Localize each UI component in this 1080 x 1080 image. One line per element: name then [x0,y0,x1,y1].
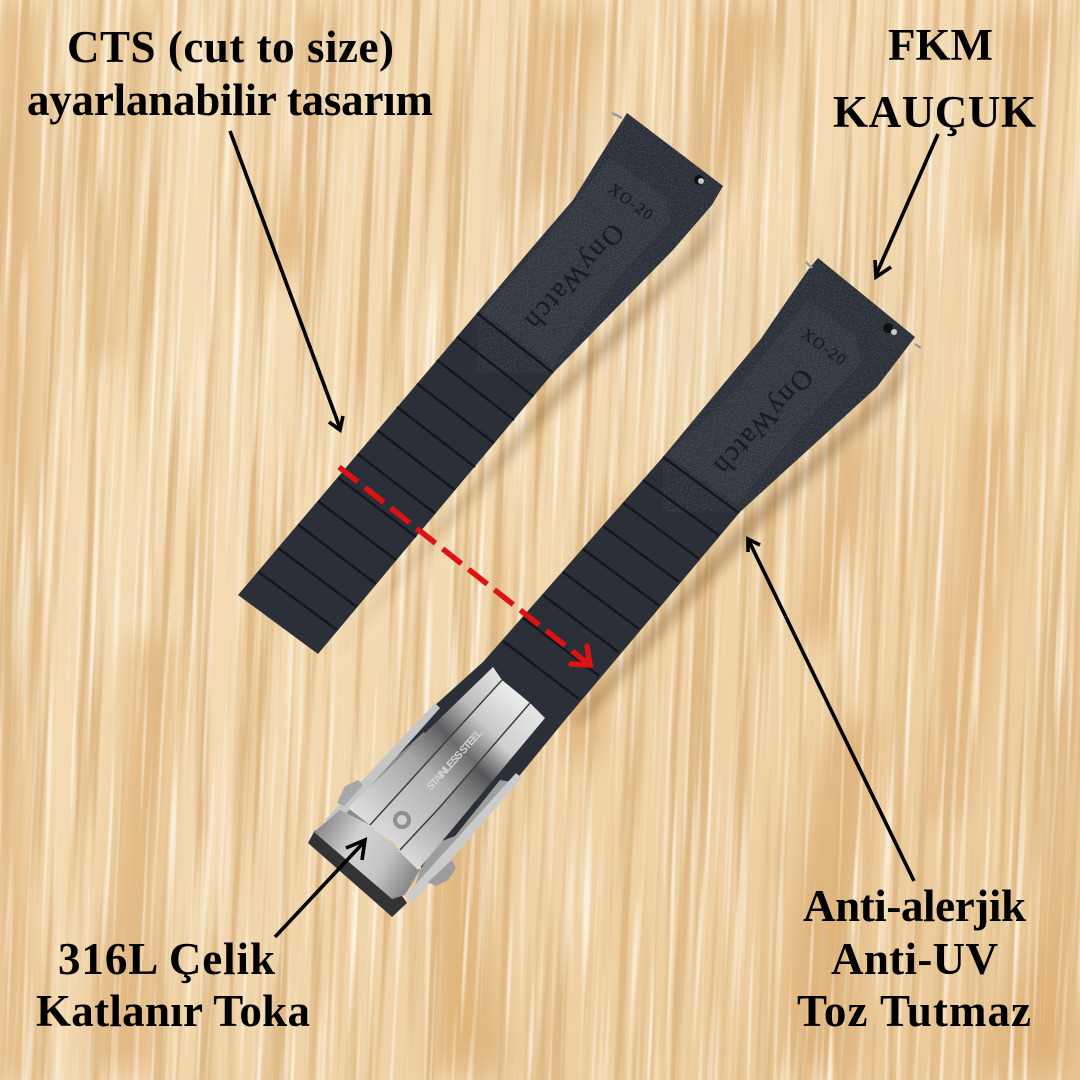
label: FKM rubber [833,20,1036,137]
label: clasp: 316L Çelik [58,934,275,984]
arrow: cut to size [230,131,343,430]
brand text: OnyWatch [519,217,630,336]
size text: XO-20 [798,326,849,369]
spring bar [612,113,704,185]
label: clasp: Katlanır Toka [36,986,310,1036]
strap: right piece [377,258,921,875]
label: CTS design [27,22,433,125]
clasp left wing [348,667,502,825]
strap: left piece [238,113,723,654]
clasp base plate [314,810,420,899]
label: features [797,881,1031,1036]
clasp right rail [405,773,522,903]
blade grooves [370,680,530,850]
red dashed arrow [339,467,590,665]
stainless steel engraving: STAINLESS STEEL [424,726,486,793]
strap body [238,113,723,654]
label: CTS design: CTS (cut to size) [67,22,394,72]
size text: XO-20 [605,181,656,224]
clasp dark front face [308,830,407,917]
label: clasp [36,934,310,1036]
label: features: Anti-alerjik [803,881,1026,931]
clasp right wing [398,703,545,870]
arrow: anti-allergic features [748,539,914,881]
arrow: FKM rubber [875,134,938,277]
label: CTS design: ayarlanabilir tasarım [27,75,433,125]
strap body [377,258,915,875]
recessed head panel [482,158,671,366]
strap rib lines [258,313,553,630]
label: FKM rubber: KAUÇUK [833,87,1036,137]
cast shadow under straps [325,195,915,725]
clasp left rail [325,703,440,826]
arrow: clasp [275,840,365,937]
recessed head panel [668,300,862,505]
brand text: OnyWatch [708,362,819,481]
label: FKM rubber: FKM [888,20,993,70]
strap rib lines [503,457,739,699]
clasp center tongue [370,680,530,850]
clasp rivet [393,811,411,829]
steel folding clasp [308,667,545,917]
clasp left lug [337,780,363,806]
spring bar [806,262,921,348]
inner left slot [335,732,433,830]
inner right wedge [412,780,512,895]
clasp right lug [428,860,456,886]
label: features: Toz Tutmaz [797,986,1031,1036]
label: features: Anti-UV [831,934,998,984]
